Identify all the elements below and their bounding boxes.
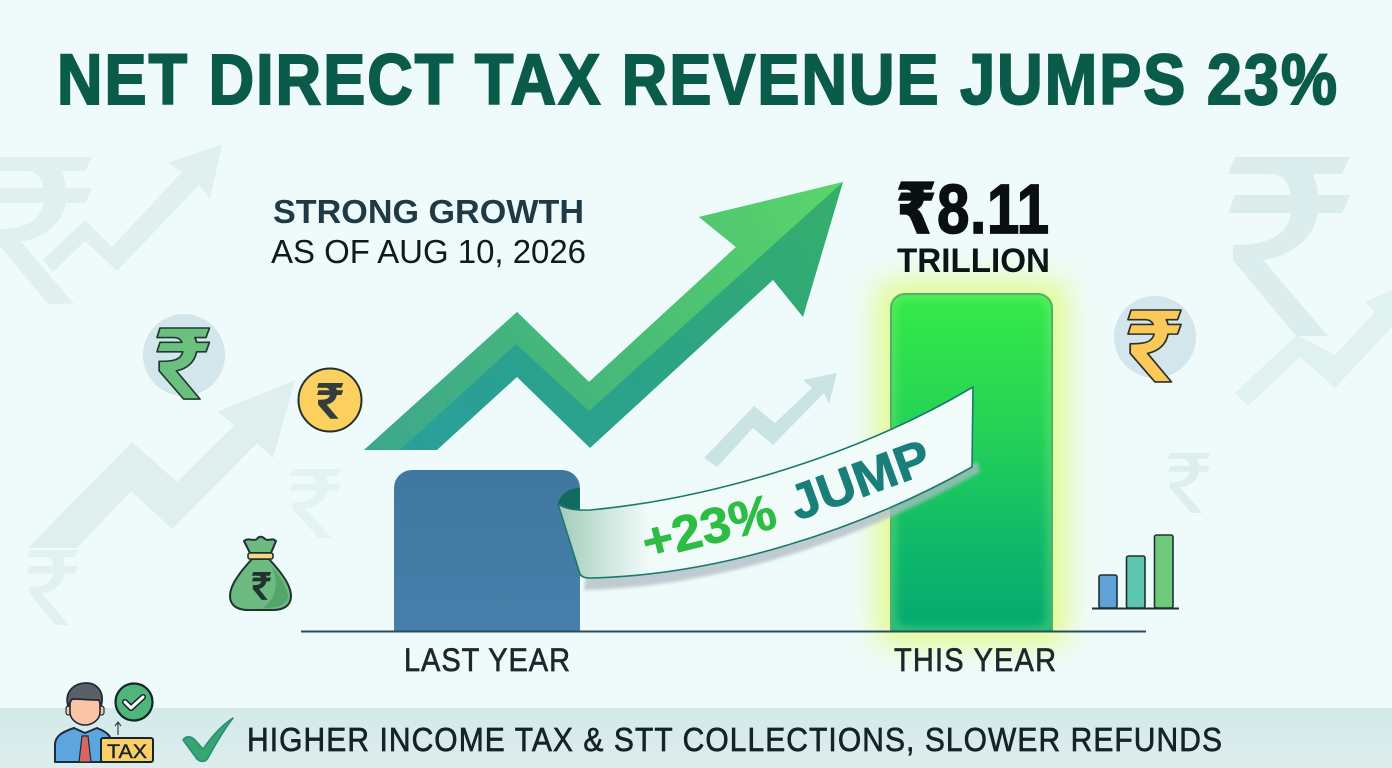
watermark: lower-left rupee	[27, 550, 78, 625]
ribbon text: +23%: +23%	[636, 483, 782, 571]
subtitle line 1: STRONG GROWTH	[273, 193, 584, 230]
ribbon: +23% jump	[558, 387, 980, 590]
small arrows	[115, 722, 121, 735]
icon: mini bar chart	[1092, 535, 1179, 608]
icon: check mark	[183, 718, 233, 762]
watermark: top-left rupee	[0, 157, 92, 304]
footer text: HIGHER INCOME TAX & STT COLLECTIONS, SLOWER REFUNDS	[247, 721, 1222, 758]
subtitle: strong growth	[271, 193, 586, 270]
value label	[896, 170, 1050, 280]
person body	[55, 728, 112, 762]
icon: money bag	[230, 537, 291, 610]
watermark: right rupee	[1228, 157, 1350, 336]
unit: trillion: TRILLION	[897, 242, 1050, 280]
bar glow: this year	[876, 280, 1068, 646]
watermark: lower-left arrow	[28, 380, 295, 548]
watermark: small right rupee	[1168, 453, 1210, 513]
bottom band	[0, 708, 1392, 768]
main growth arrow	[364, 182, 843, 450]
label: this year: THIS YEAR	[894, 641, 1056, 678]
watermark: right arrow	[1235, 290, 1392, 406]
check badge	[116, 684, 152, 720]
watermark: top-left arrow	[43, 144, 222, 272]
label: last year: LAST YEAR	[404, 641, 570, 678]
tax tag text: TAX	[107, 742, 147, 763]
chart baseline	[301, 630, 1146, 632]
bar: this year	[891, 294, 1052, 632]
title: NET DIRECT TAX REVENUE JUMPS 23%	[57, 40, 1337, 120]
value: 8.11: ₹8.11	[896, 170, 1049, 248]
icon: yellow rupee in circle	[1114, 296, 1196, 382]
icon: green rupee in circle	[143, 314, 225, 399]
bar: last year	[394, 470, 580, 632]
tax tag	[101, 738, 153, 762]
subtitle line 2: AS OF AUG 10, 2026	[271, 233, 586, 270]
icon: gold rupee coin	[298, 368, 362, 432]
ribbon text: JUMP: JUMP	[782, 429, 938, 531]
icon: tax professional	[55, 683, 153, 763]
watermark: centre-left rupee	[290, 469, 341, 538]
watermark: small centre arrow	[704, 373, 837, 467]
background watermark: rupee and arrow graphics	[0, 144, 1392, 625]
